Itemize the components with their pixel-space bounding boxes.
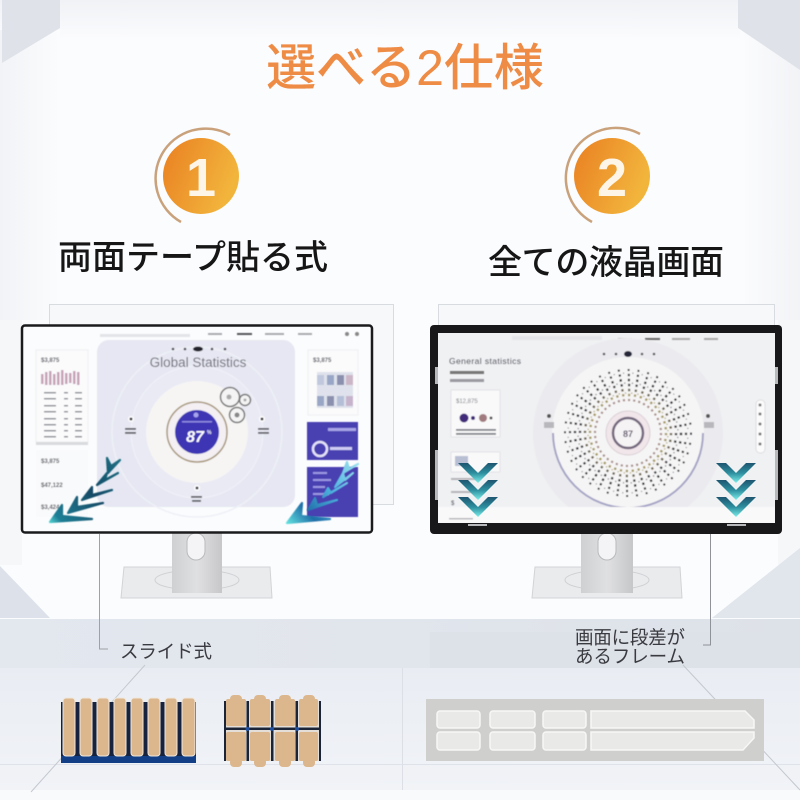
monitor stand 2 <box>532 533 682 598</box>
arrow: right triple chevron <box>716 463 756 517</box>
monitor 2 dashboard <box>438 336 775 528</box>
label: slide type: スライド式 <box>120 641 212 662</box>
monitor 1 dashboard: $3,424 <box>41 505 60 511</box>
tape sheet: frame type <box>426 699 764 761</box>
badge 1: 1 <box>186 148 216 208</box>
arrow: left feather arrow <box>50 458 120 522</box>
tape sheet: cross type <box>224 695 321 767</box>
heading: option 1: 両面テープ貼る式 <box>58 239 328 277</box>
monitor 1 dashboard: % <box>207 430 212 436</box>
monitor 1 dashboard: $3,875 <box>41 459 60 465</box>
badge 2: 2 <box>597 148 627 208</box>
monitor 1 dashboard: $47,122 <box>41 483 63 489</box>
monitor 1 bezel <box>22 326 372 532</box>
monitor 2 screen <box>438 333 775 523</box>
monitor 1 dashboard: $3,875 <box>41 358 60 364</box>
monitor 1 <box>22 326 372 532</box>
monitor stand 1 <box>121 533 272 598</box>
callout line: left <box>100 534 108 649</box>
backing panel: option 2 <box>438 304 774 504</box>
callout line: right <box>703 534 710 645</box>
heading: option 2: 全ての液晶画面 <box>488 244 724 282</box>
label: stepped frame <box>575 627 685 667</box>
side tabs <box>435 367 778 526</box>
diagonal guide lines <box>31 665 800 792</box>
monitor 1 dashboard <box>36 332 359 517</box>
monitor 2 dashboard: $ <box>451 501 455 507</box>
badge 2 <box>566 128 650 222</box>
monitor 2 dashboard: $12,875 <box>456 399 478 405</box>
arrow: right feather arrow <box>287 462 358 523</box>
backing panel: option 1 <box>50 304 394 504</box>
monitor 2 bezel <box>430 325 782 534</box>
badge 1 <box>156 129 239 222</box>
monitor 1 dashboard: 87 <box>186 429 205 446</box>
arrow: left triple chevron <box>458 463 498 517</box>
tape sheet: slide type <box>61 698 196 763</box>
monitor 2 screen title: General statistics <box>449 356 521 366</box>
monitor 2 <box>430 325 782 534</box>
label: stepped frame: 画面に段差が <box>575 627 685 648</box>
monitor 2 dashboard: 87 <box>623 429 633 439</box>
monitor 1 dashboard: $3,875 <box>313 358 332 364</box>
title: 選べる2仕様 <box>266 40 544 96</box>
monitor 1 screen title: Global Statistics <box>150 355 247 370</box>
label: stepped frame: あるフレーム <box>575 646 685 667</box>
